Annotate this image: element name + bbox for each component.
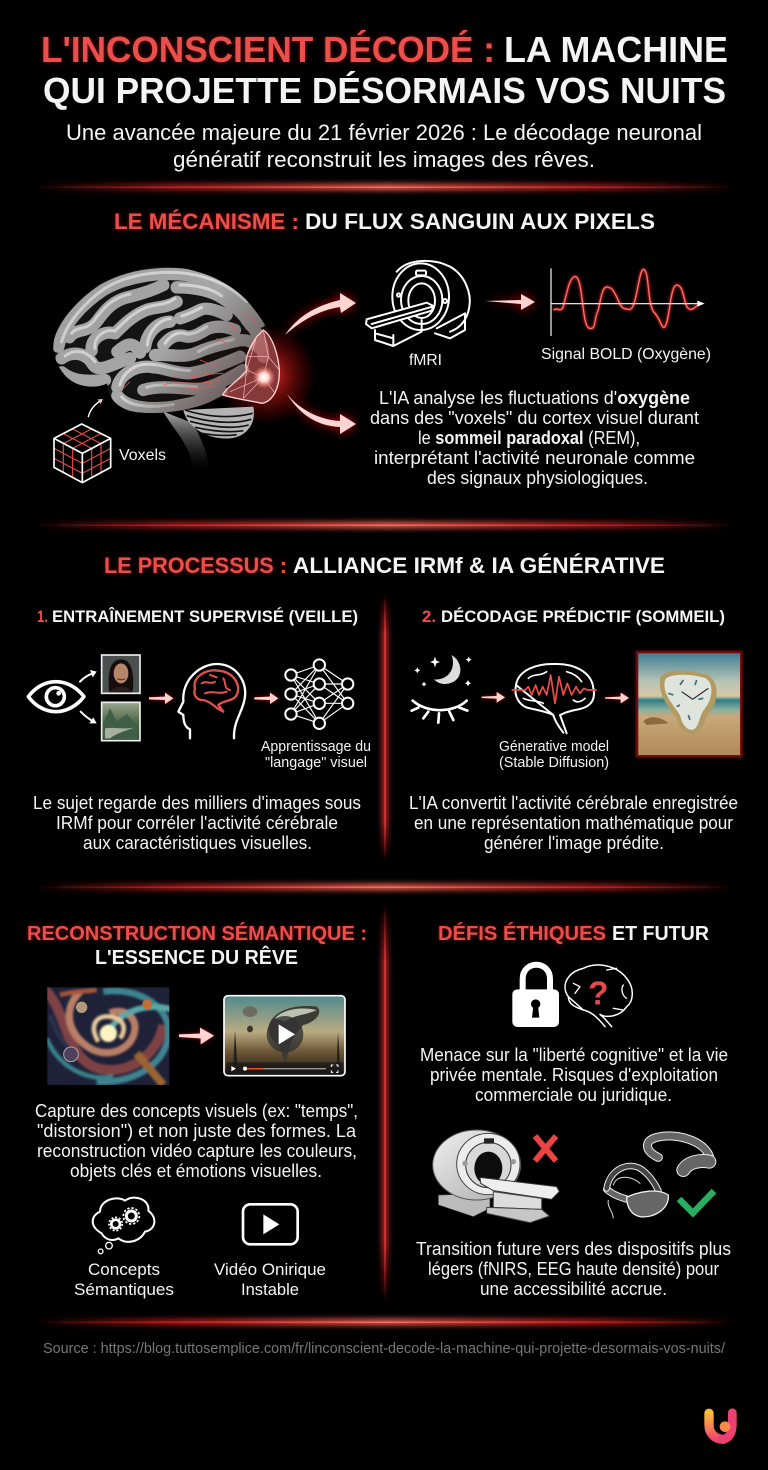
heading: processus (104, 553, 665, 578)
image: video player (224, 996, 345, 1076)
heading: mécanisme: LE MÉCANISME : (114, 209, 299, 234)
brain illustration (50, 263, 317, 470)
icon: padlock and brain question: ? (588, 975, 609, 1012)
arrow: brain to fMRI (285, 293, 356, 335)
text: transition: Transition future vers des dispositifs plus (416, 1239, 731, 1259)
icon: fMRI scanner (366, 261, 470, 346)
icon: moon and closed eye (412, 655, 472, 723)
text: reconstruction description: reconstruction vidéo capture les couleurs, (37, 1141, 357, 1161)
label: vidéo onirique (214, 1260, 326, 1299)
icon: voxels (54, 399, 111, 483)
text: menace (420, 1045, 728, 1105)
text: mécanisme description: dans des "voxels" du cortex visuel durant (370, 408, 699, 428)
icon: head with brain (178, 664, 245, 738)
label: generative model: (Stable Diffusion) (499, 754, 609, 771)
text: reconstruction description (35, 1101, 358, 1181)
title: LA MACHINE (504, 29, 728, 70)
image: portrait (102, 655, 140, 693)
label: apprentissage: "langage" visuel (265, 754, 367, 771)
label: fMRI: fMRI (409, 352, 442, 369)
text: step 1 (33, 793, 361, 853)
label: signal BOLD: Signal BOLD (Oxygène) (541, 346, 711, 363)
arrow (179, 1028, 214, 1044)
text: step 1: Le sujet regarde des milliers d'images sous (33, 793, 361, 813)
heading: reconstruction: L'ESSENCE DU RÊVE (95, 945, 298, 969)
heading: reconstruction: RECONSTRUCTION SÉMANTIQUE : (27, 922, 367, 945)
label: generative model (499, 738, 609, 771)
heading: mécanisme (114, 209, 655, 234)
panel: défis éthiques (416, 922, 731, 1299)
label: concepts sémantiques: Sémantiques (74, 1280, 174, 1299)
label: vidéo onirique: Instable (241, 1280, 299, 1299)
text: mécanisme description: L'IA analyse les fluctuations d'oxygène (379, 388, 690, 408)
arrow: fMRI to signal (485, 294, 535, 310)
icon: thought cloud with gears (93, 1198, 154, 1254)
text: menace: privée mentale. Risques d'exploitation (430, 1065, 718, 1085)
icon: MRI machine crossed (433, 1130, 559, 1223)
icon: padlock and brain question (512, 965, 632, 1027)
label: concepts sémantiques: Concepts (88, 1260, 160, 1279)
arrow (149, 693, 173, 704)
text: step 2: générer l'image prédite. (484, 833, 664, 853)
chart: BOLD signal (551, 268, 705, 336)
arrow (605, 693, 629, 703)
text: reconstruction description: Capture des concepts visuels (ex: "temps", (35, 1101, 358, 1121)
subheading: step 1: ENTRAÎNEMENT SUPERVISÉ (VEILLE) (52, 607, 358, 626)
subtitle (66, 120, 702, 172)
text: mécanisme description (370, 388, 699, 488)
text: menace: Menace sur la "liberté cognitive" et la vie (420, 1045, 728, 1065)
heading: mécanisme: DU FLUX SANGUIN AUX PIXELS (305, 209, 655, 234)
text: step 1: IRMf pour corréler l'activité cérébrale (56, 813, 338, 833)
text: transition: une accessibilité accrue. (480, 1279, 667, 1299)
text: transition (416, 1239, 731, 1299)
arrow (254, 693, 278, 704)
icon: neural network (285, 659, 353, 729)
icon: eye (28, 670, 97, 723)
text: reconstruction description: "distorsion") et non juste des formes. La (37, 1121, 357, 1141)
icon: video play (243, 1204, 298, 1244)
label: apprentissage: Apprentissage du (261, 738, 371, 755)
icon: brain with signal (512, 664, 597, 733)
heading: défis (438, 922, 710, 945)
text: mécanisme description: le sommeil paradoxal (REM), (418, 428, 640, 448)
title (41, 29, 728, 111)
source line: Source : https://blog.tuttosemplice.com/fr/linconscient-decode-la-machine-qui-projette-desormais-vos-nuits/ (43, 1340, 726, 1357)
text: mécanisme description: interprétant l'activité neuronale comme (374, 448, 695, 468)
subheading: step 1: 1. (37, 607, 48, 626)
arrow (482, 692, 505, 703)
heading: défis: ET FUTUR (612, 923, 710, 945)
text: reconstruction description: objets clés et émotions visuelles. (70, 1161, 322, 1181)
image: landscape (102, 702, 140, 741)
heading: défis: DÉFIS ÉTHIQUES (438, 922, 606, 945)
label: concepts sémantiques (74, 1260, 174, 1299)
images: dream to video (43, 987, 345, 1085)
icon: red cross (535, 1136, 556, 1161)
text: step 2: en une représentation mathématique pour (414, 813, 733, 833)
subtitle: génératif reconstruit les images des rêves. (173, 147, 595, 172)
text: step 1: aux caractéristiques visuelles. (83, 833, 312, 853)
panel: processus (28, 553, 743, 860)
subheading: step 2: 2. (422, 607, 436, 626)
subtitle: Une avancée majeure du 21 février 2026 : Le décodage neuronal (66, 120, 702, 145)
heading: processus: LE PROCESSUS : (104, 553, 287, 578)
arrow: brain to text (287, 394, 356, 434)
diagram: step 1 (28, 655, 353, 741)
icon: green check (679, 1191, 714, 1213)
text: step 2: L'IA convertit l'activité cérébrale enregistrée (409, 793, 738, 813)
text: transition: légers (fNIRS, EEG haute densité) pour (428, 1259, 719, 1279)
icon: logo (709, 1413, 732, 1439)
text: menace: commerciale ou juridique. (475, 1085, 672, 1105)
heading: reconstruction (27, 922, 367, 969)
image: melting clock (636, 651, 743, 758)
heading: processus: ALLIANCE IRMf & IA GÉNÉRATIVE (293, 553, 665, 578)
image: swirl (43, 987, 173, 1085)
label: vidéo onirique: Vidéo Onirique (214, 1260, 326, 1279)
panel: mécanisme (50, 209, 711, 488)
icon: wearable headset and headband (607, 1136, 709, 1218)
text: mécanisme description: des signaux physiologiques. (427, 468, 648, 488)
subheading: step 2: DÉCODAGE PRÉDICTIF (SOMMEIL) (441, 607, 725, 626)
label: generative model: Génerative model (499, 738, 609, 755)
diagram: step 2 (412, 651, 743, 758)
title: L'INCONSCIENT DÉCODÉ : (41, 29, 495, 70)
label: apprentissage (261, 738, 371, 771)
title: QUI PROJETTE DÉSORMAIS VOS NUITS (43, 70, 726, 111)
text: step 2 (409, 793, 738, 853)
panel: reconstruction sémantique (27, 922, 367, 1299)
label: voxels: Voxels (119, 447, 166, 464)
